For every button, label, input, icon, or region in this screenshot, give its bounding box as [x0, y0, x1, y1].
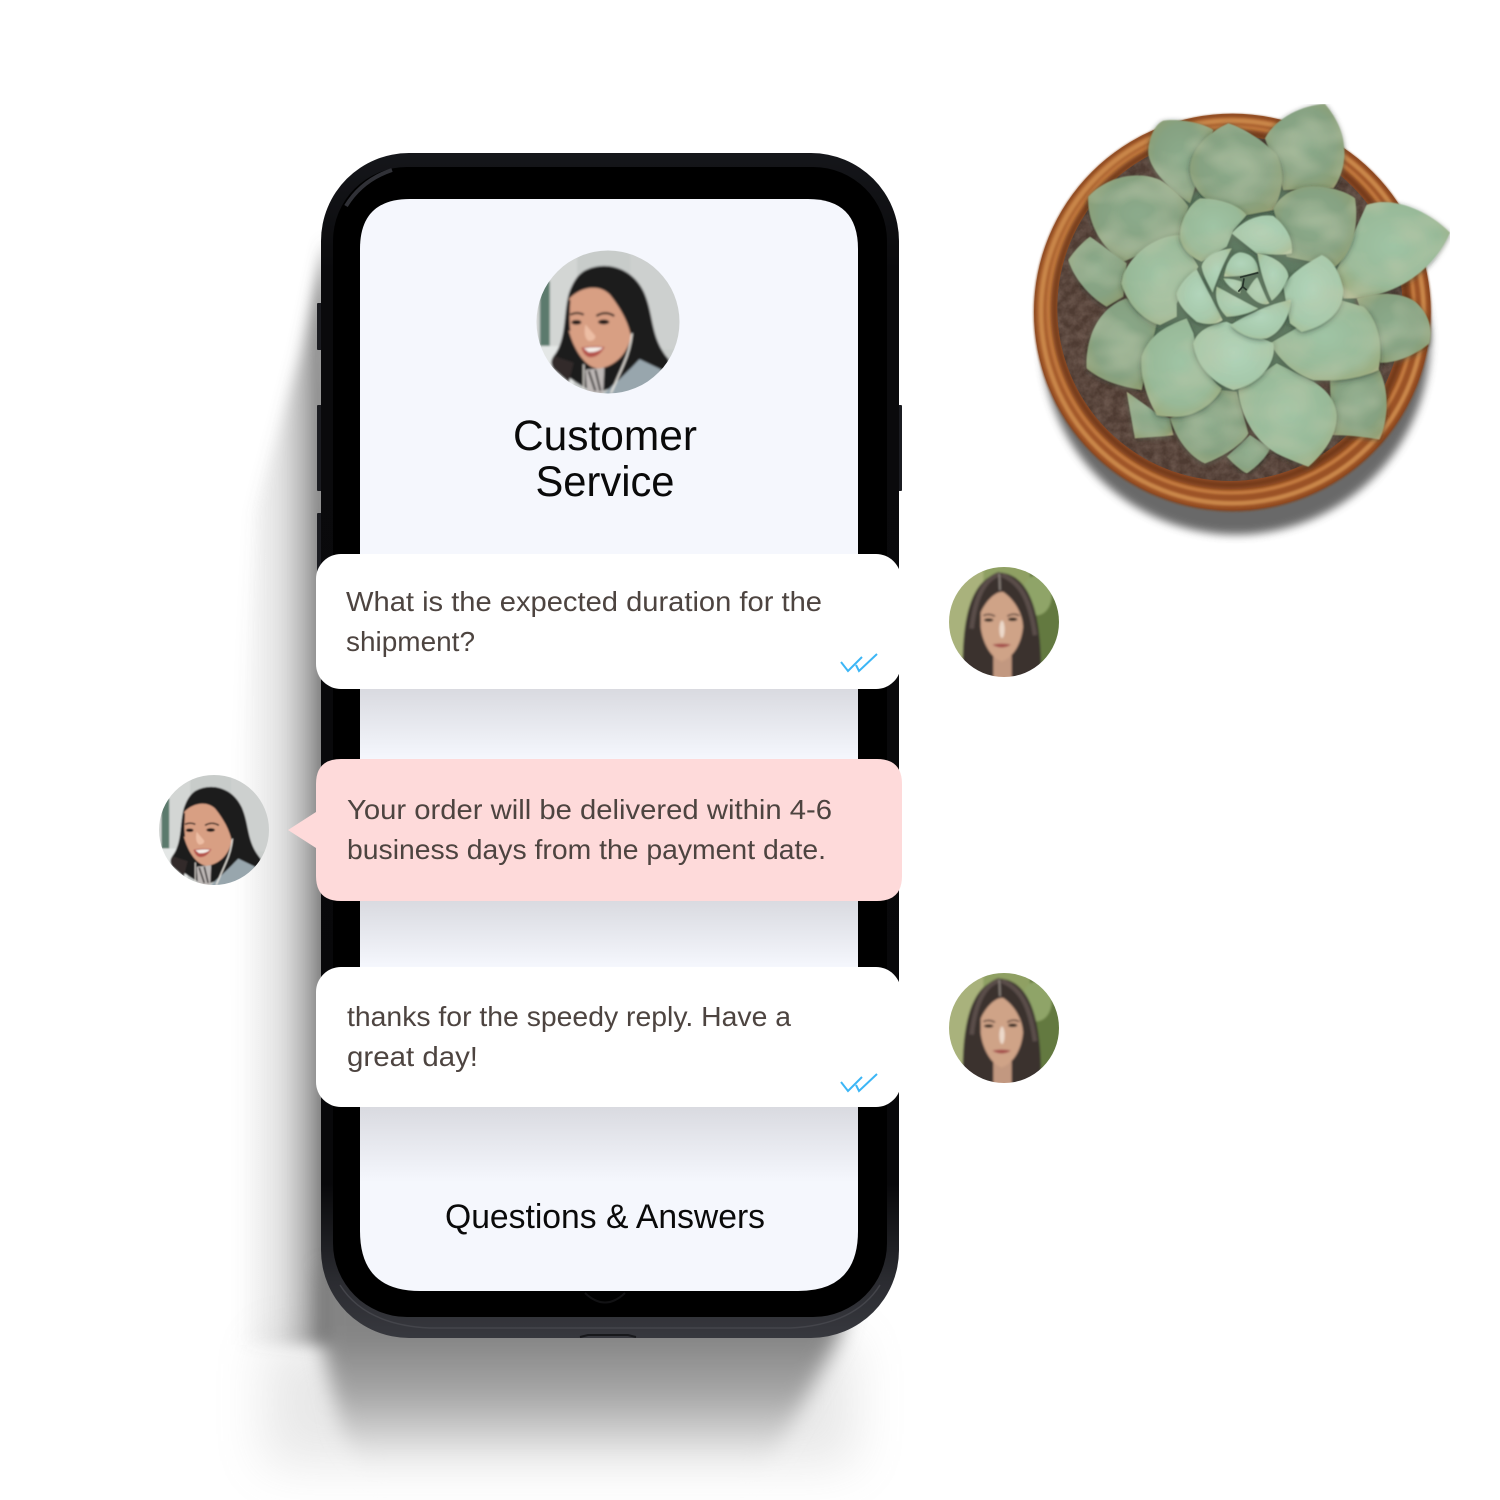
succulent plant in copper pot	[1034, 104, 1450, 535]
phone drop shadow	[238, 240, 855, 1480]
pot shadow	[1042, 147, 1430, 535]
inner petals	[1177, 198, 1343, 390]
soil	[1057, 136, 1403, 481]
phone	[317, 153, 902, 1338]
agent avatar left	[152, 769, 277, 892]
heading: Customer Service: Customer	[513, 412, 697, 460]
chat bubble: customer question: What is the expected duration for the	[346, 586, 822, 617]
phone inner bezel	[333, 167, 887, 1317]
chat bubble: customer thanks: great day!	[347, 1041, 478, 1072]
middle petals	[1122, 123, 1380, 467]
rosette under-layer	[1130, 180, 1357, 407]
back petals	[1068, 104, 1450, 473]
chat bubble: agent answer: Your order will be delivered within 4-6	[347, 794, 832, 825]
agent avatar large	[527, 243, 690, 402]
footer label: Questions & Answers: Questions & Answers	[445, 1198, 765, 1236]
icon: read ticks	[841, 1074, 877, 1091]
phone screen	[360, 199, 858, 1291]
phone bezel highlights	[340, 170, 880, 1337]
copper pot	[1034, 114, 1431, 510]
icon: read ticks	[841, 654, 877, 671]
phone body	[321, 153, 899, 1338]
infographic canvas	[159, 104, 1450, 1477]
customer avatar bottom	[943, 968, 1067, 1088]
heading: Customer Service: Service	[536, 458, 674, 506]
customer avatar top	[943, 562, 1067, 682]
rosette centre cracks	[1238, 273, 1258, 292]
chat bubble: agent answer: business days from the payment date.	[347, 834, 826, 865]
chat bubble: customer question	[316, 554, 901, 689]
chat bubble: agent answer	[288, 759, 902, 901]
rosette petals	[1068, 104, 1450, 473]
screen shade bands below bubbles	[360, 689, 858, 1182]
heading: Customer Service	[513, 412, 697, 506]
chat bubble: customer thanks	[316, 967, 901, 1107]
side buttons	[317, 303, 902, 575]
chat bubble: customer thanks: thanks for the speedy reply. Have a	[347, 1001, 791, 1032]
chat bubble: customer question: shipment?	[346, 626, 475, 657]
